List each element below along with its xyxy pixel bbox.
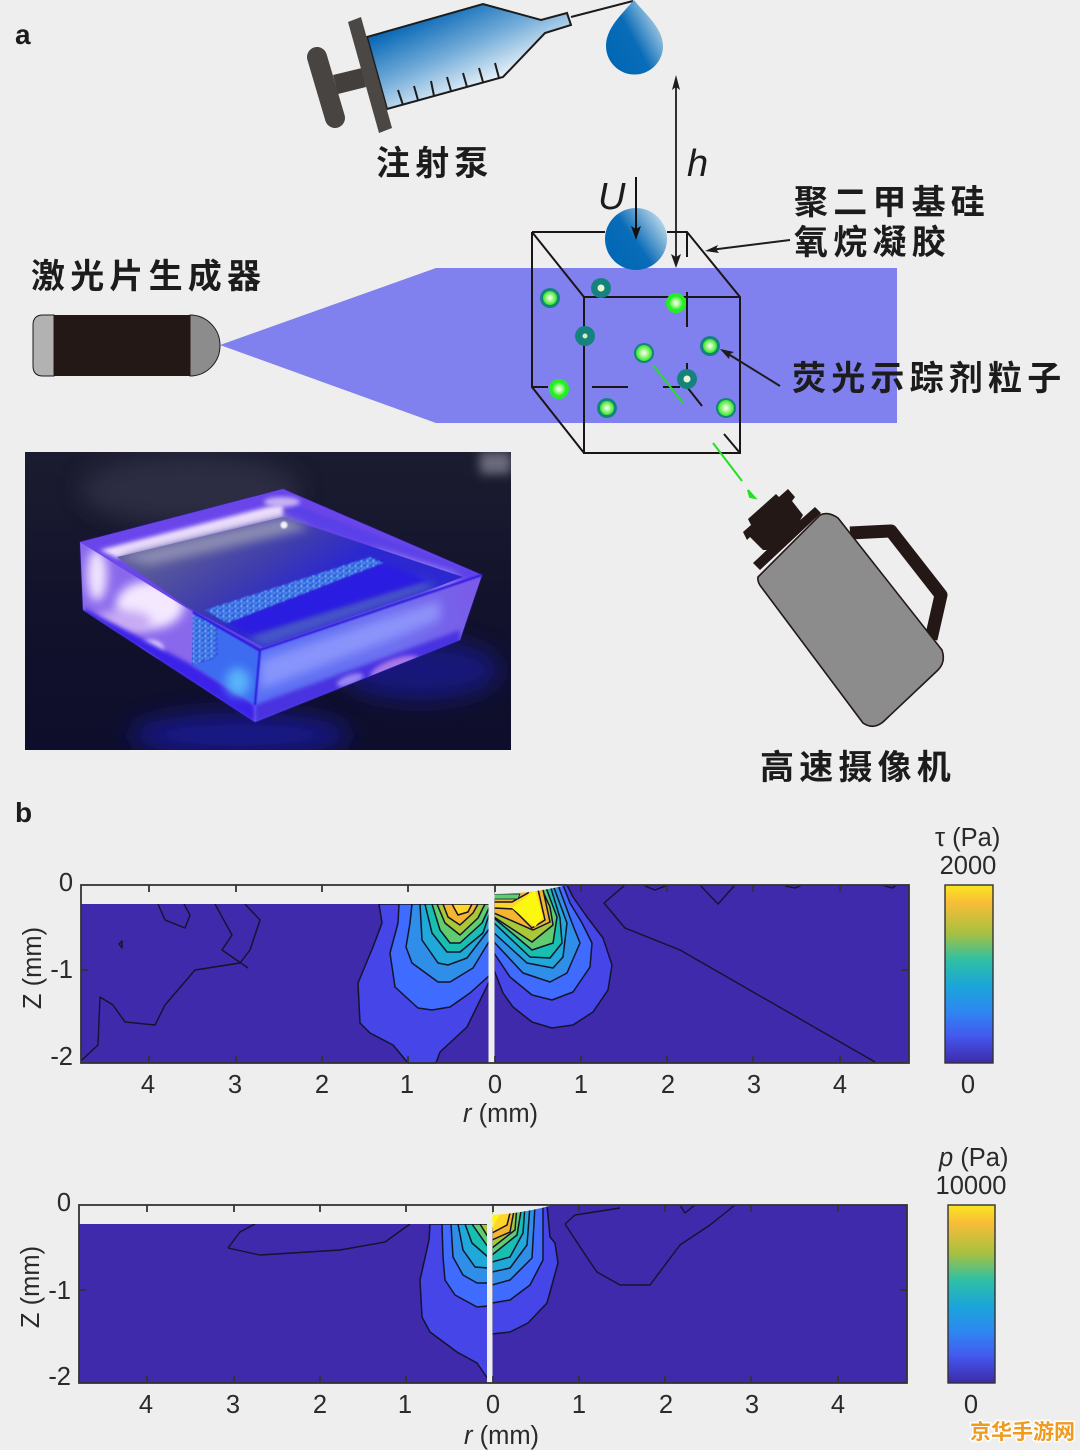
label: fluorescent tracer particles: 荧光示踪剂粒子 bbox=[792, 360, 1066, 398]
pressure right contours bbox=[492, 1205, 558, 1334]
velocity label U: U bbox=[598, 176, 626, 218]
arrow: height h bbox=[671, 75, 681, 268]
top rim of block bbox=[78, 485, 488, 655]
pressure left contours bbox=[420, 1224, 488, 1379]
chart: shear stress contour: -1 bbox=[50, 956, 73, 984]
chart: pressure contour: 0 bbox=[486, 1391, 500, 1419]
PDMS cube wireframe bbox=[532, 232, 740, 453]
height label h: h bbox=[687, 143, 708, 185]
panel label a: a bbox=[15, 19, 31, 50]
chart: pressure contour: 3 bbox=[226, 1391, 240, 1419]
label: high speed camera: 高速摄像机 bbox=[760, 749, 956, 787]
chart: pressure contour: 0 bbox=[57, 1189, 71, 1217]
label: syringe pump: 注射泵 bbox=[376, 145, 494, 183]
chart: pressure contour: 1 bbox=[398, 1391, 412, 1419]
chart: shear stress contour: 2 bbox=[661, 1071, 675, 1099]
arrow to cube bbox=[705, 240, 790, 253]
colorbar: pressure: 10000 bbox=[936, 1172, 1006, 1200]
icon: falling droplet bbox=[606, 0, 663, 74]
chart: shear stress contour: 4 bbox=[833, 1071, 847, 1099]
chart: shear stress contour: -2 bbox=[50, 1043, 73, 1071]
colorbar: pressure: 0 bbox=[964, 1391, 978, 1419]
label: PDMS gel: 聚二甲基硅 bbox=[794, 184, 990, 222]
colorbar: shear stress: τ (Pa) bbox=[935, 824, 1000, 852]
green fluorescence ray bbox=[653, 365, 755, 498]
label: PDMS gel: 氧烷凝胶 bbox=[794, 224, 951, 262]
icon: syringe pump bbox=[317, 1, 633, 133]
droplet above cube with velocity arrow bbox=[605, 177, 667, 270]
colorbar: shear stress bbox=[935, 824, 1000, 1099]
chart: pressure contour: 4 bbox=[831, 1391, 845, 1419]
chart: pressure contour: 1 bbox=[572, 1391, 586, 1419]
right contours bbox=[494, 885, 612, 1028]
colorbar: shear stress: 0 bbox=[961, 1071, 975, 1099]
colorbar: pressure bbox=[936, 1144, 1008, 1419]
watermark: 京华手游网 bbox=[970, 1420, 1075, 1444]
chart: shear stress contour: 0 bbox=[488, 1071, 502, 1099]
chart: shear stress contour: Z (mm) bbox=[19, 927, 47, 1009]
chart: pressure contour: Z (mm) bbox=[17, 1246, 45, 1328]
background contour lines bbox=[82, 885, 897, 1062]
colorbar: shear stress: 2000 bbox=[940, 852, 996, 880]
chart: pressure contour: -1 bbox=[48, 1277, 71, 1305]
panel label b: b bbox=[15, 797, 32, 828]
chart: pressure contour: r (mm) bbox=[464, 1422, 539, 1450]
chart: shear stress contour: r (mm) bbox=[463, 1100, 538, 1128]
icon: laser sheet generator bbox=[33, 315, 220, 376]
glass corner wedge bbox=[192, 627, 260, 705]
pressure background contour lines bbox=[228, 1205, 735, 1285]
chart: pressure contour: 3 bbox=[745, 1391, 759, 1419]
chart: shear stress contour: 3 bbox=[228, 1071, 242, 1099]
arrow to particle bbox=[720, 349, 780, 386]
chart: shear stress contour: 0 bbox=[59, 869, 73, 897]
photo: glowing PDMS block bbox=[25, 452, 511, 757]
front right face of block bbox=[250, 570, 485, 725]
chart: pressure contour bbox=[17, 1189, 907, 1450]
icon: high speed camera bbox=[743, 489, 943, 726]
chart: shear stress contour: 2 bbox=[315, 1071, 329, 1099]
chart: shear stress contour: 3 bbox=[747, 1071, 761, 1099]
left face of block bbox=[78, 540, 258, 725]
colorbar: pressure: p (Pa) bbox=[938, 1144, 1008, 1172]
label: PDMS gel bbox=[794, 184, 990, 262]
chart: shear stress contour: 1 bbox=[574, 1071, 588, 1099]
tracer particles bbox=[540, 278, 736, 418]
left contours bbox=[358, 904, 490, 1063]
chart: pressure contour: 4 bbox=[139, 1391, 153, 1419]
chart: shear stress contour: 1 bbox=[400, 1071, 414, 1099]
chart: pressure contour: 2 bbox=[659, 1391, 673, 1419]
chart: shear stress contour: 4 bbox=[141, 1071, 155, 1099]
laser sheet beam bbox=[220, 268, 897, 423]
chart: shear stress contour bbox=[19, 869, 909, 1128]
chart: pressure contour: 2 bbox=[313, 1391, 327, 1419]
chart: pressure contour: -2 bbox=[48, 1363, 71, 1391]
label: laser sheet generator: 激光片生成器 bbox=[31, 258, 266, 296]
